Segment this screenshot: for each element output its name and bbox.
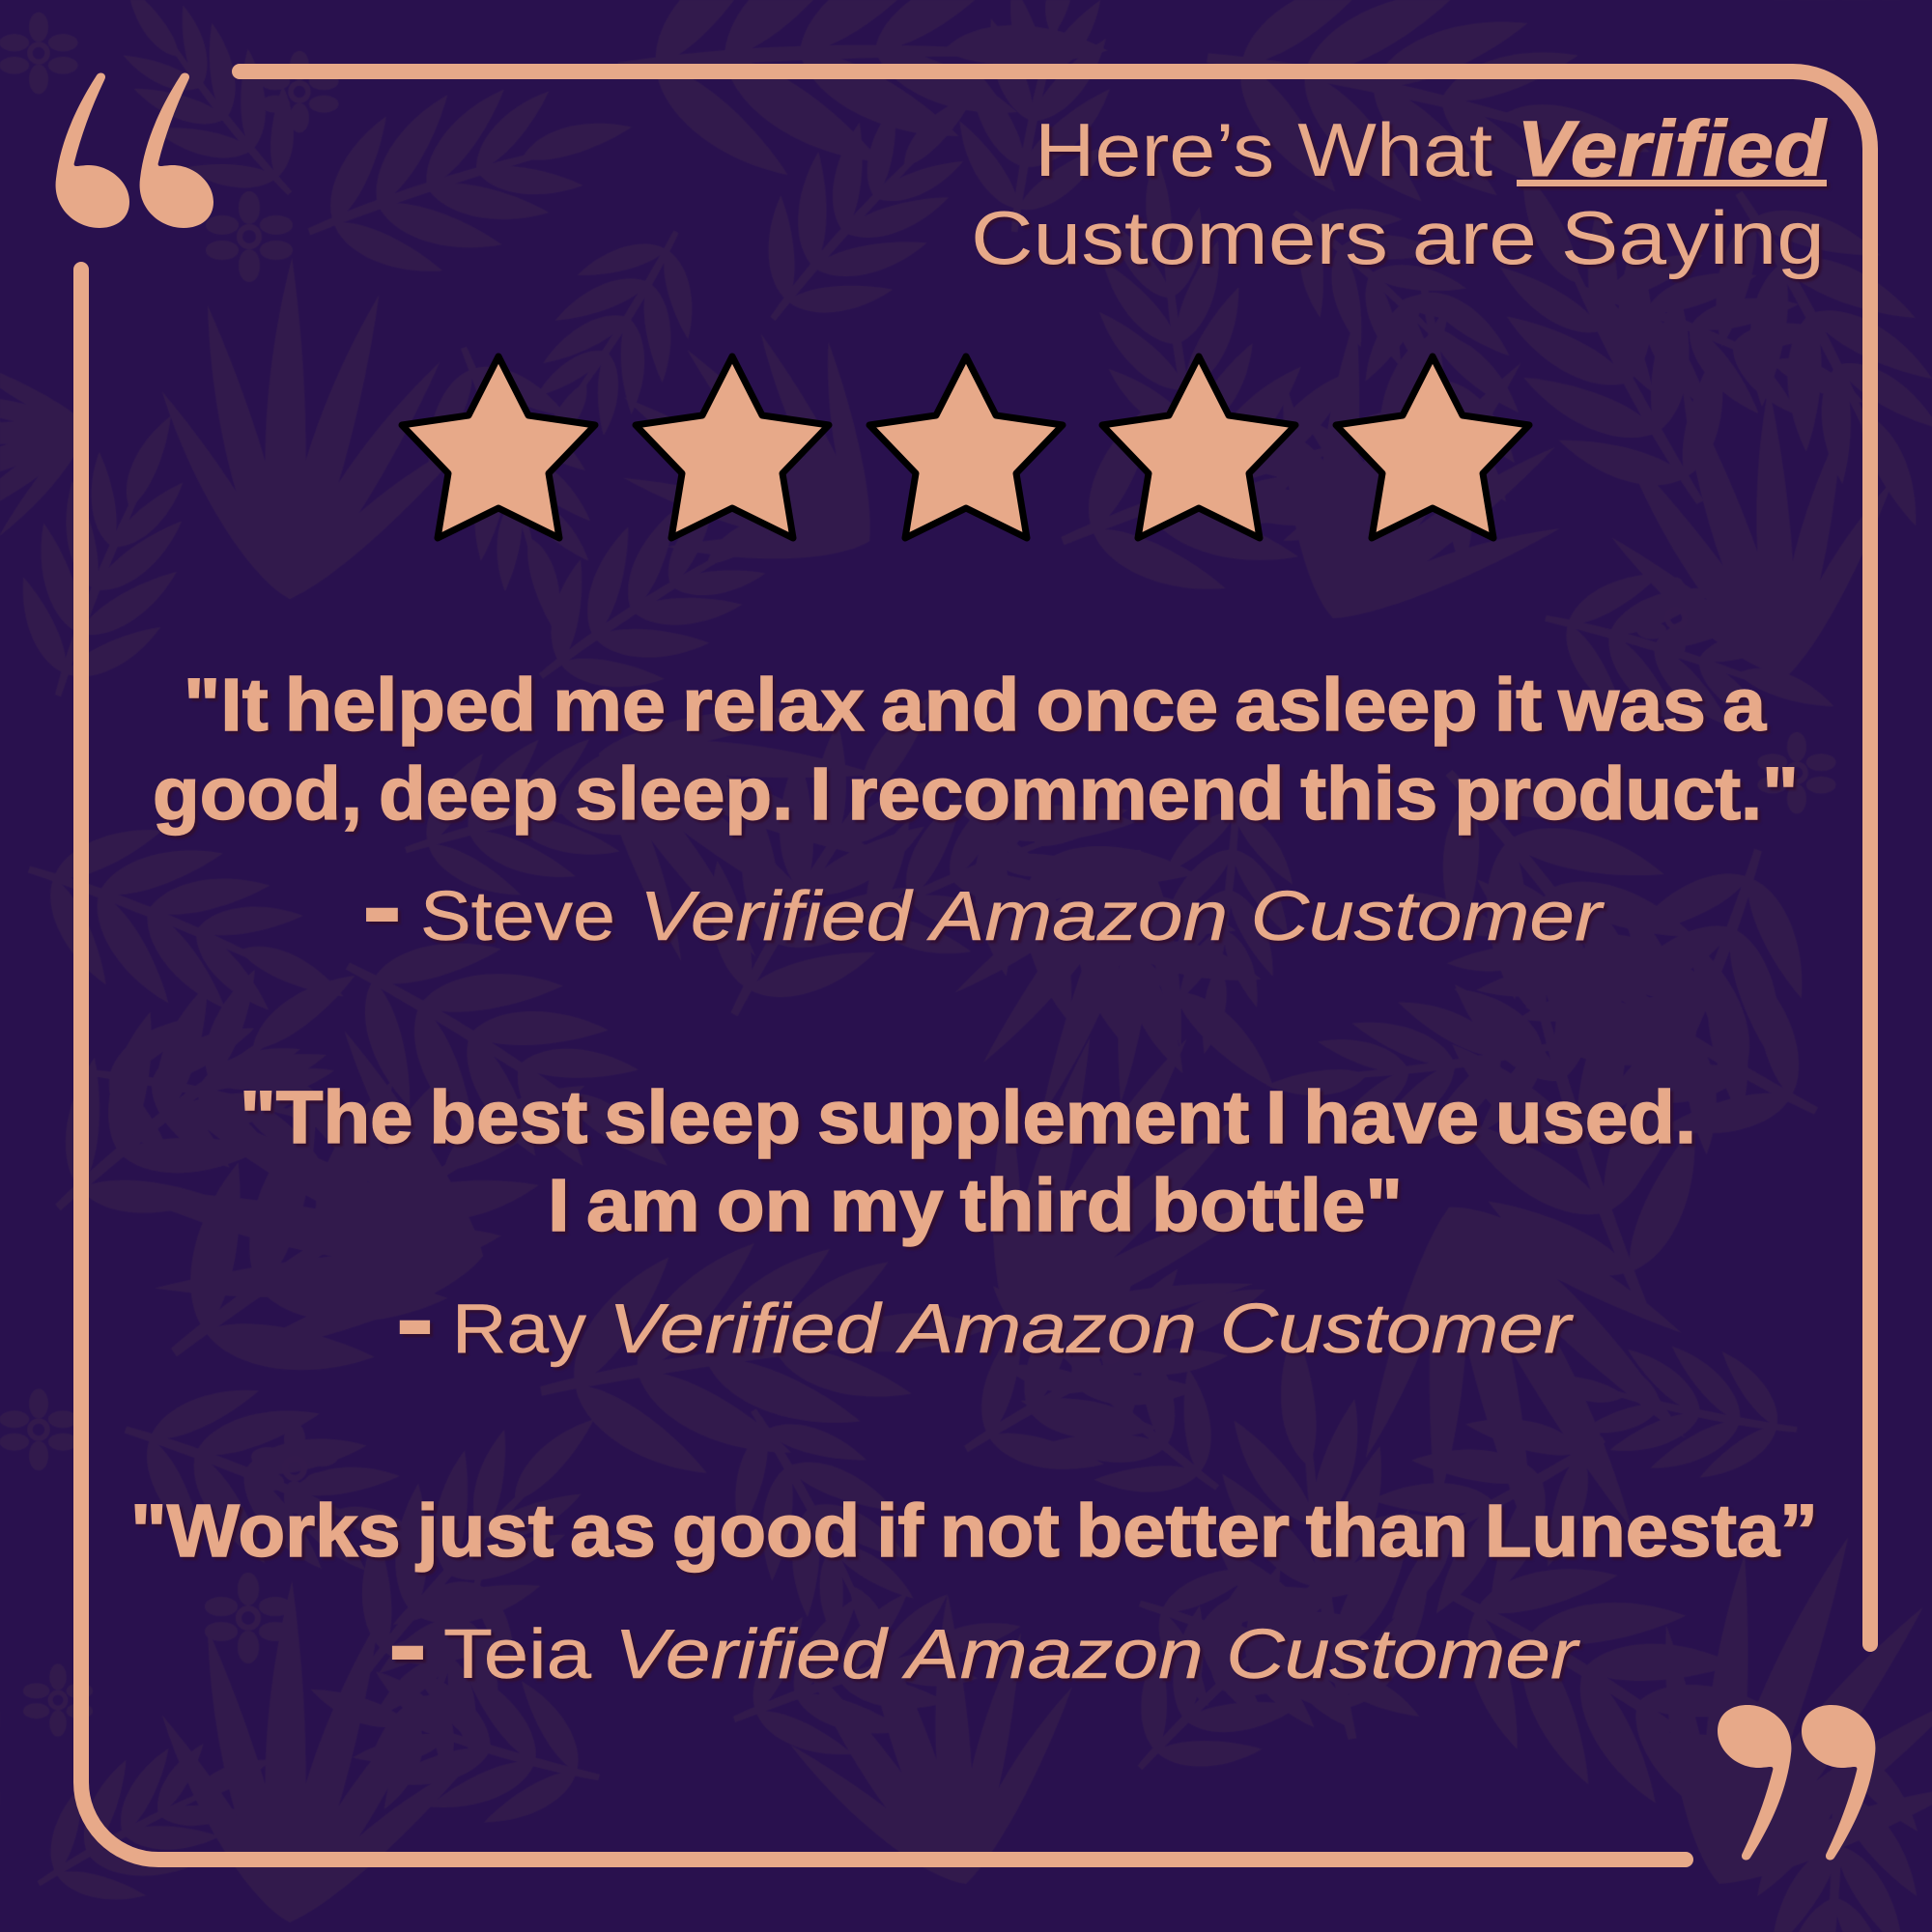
frame line: left and bottom (81, 270, 1686, 1860)
review 3 attribution: Verified Amazon Customer (614, 1616, 1581, 1693)
heading line 2: Customers are Saying (971, 195, 1825, 280)
review 2 attribution: Verified Amazon Customer (609, 1291, 1575, 1368)
heading (971, 105, 1828, 280)
star 2 (636, 356, 829, 538)
star 4 (1102, 356, 1295, 538)
review 3 quote: "Works just as good if not better than Lunesta” (130, 1490, 1818, 1573)
heading line 1: Here’s What (1035, 107, 1492, 192)
icon: opening quotation mark (56, 73, 213, 228)
review 1 quote line 1: "It helped me relax and once asleep it was a (184, 664, 1767, 747)
review 3 attribution: Teia (443, 1616, 592, 1693)
review 2 attribution: - (395, 1253, 435, 1382)
heading line 1: Verified (1517, 105, 1828, 193)
five star rating (402, 356, 1529, 538)
icon: closing quotation mark (1718, 1705, 1875, 1860)
review 2 quote line 1: "The best sleep supplement I have used. (240, 1076, 1696, 1159)
frame line: top and right (240, 71, 1870, 1644)
star 3 (869, 356, 1063, 538)
star 5 (1336, 356, 1529, 538)
star 1 (402, 356, 595, 538)
review 2 (240, 1076, 1696, 1382)
review 1 attribution: - (361, 840, 403, 970)
review 2 quote line 2: I am on my third bottle" (548, 1164, 1403, 1247)
review 2 attribution (395, 1253, 1575, 1382)
review 3 attribution: - (387, 1578, 428, 1708)
review 3 (130, 1490, 1818, 1708)
review 3 attribution (387, 1578, 1581, 1708)
review 2 attribution: Ray (452, 1291, 586, 1368)
review 1 attribution (361, 840, 1605, 970)
review 1 quote line 2: good, deep sleep. I recommend this product." (153, 753, 1799, 836)
review 1 (153, 664, 1799, 970)
heading line 1 (1035, 105, 1828, 193)
review 1 attribution: Verified Amazon Customer (639, 878, 1605, 955)
review 1 attribution: Steve (420, 878, 615, 955)
